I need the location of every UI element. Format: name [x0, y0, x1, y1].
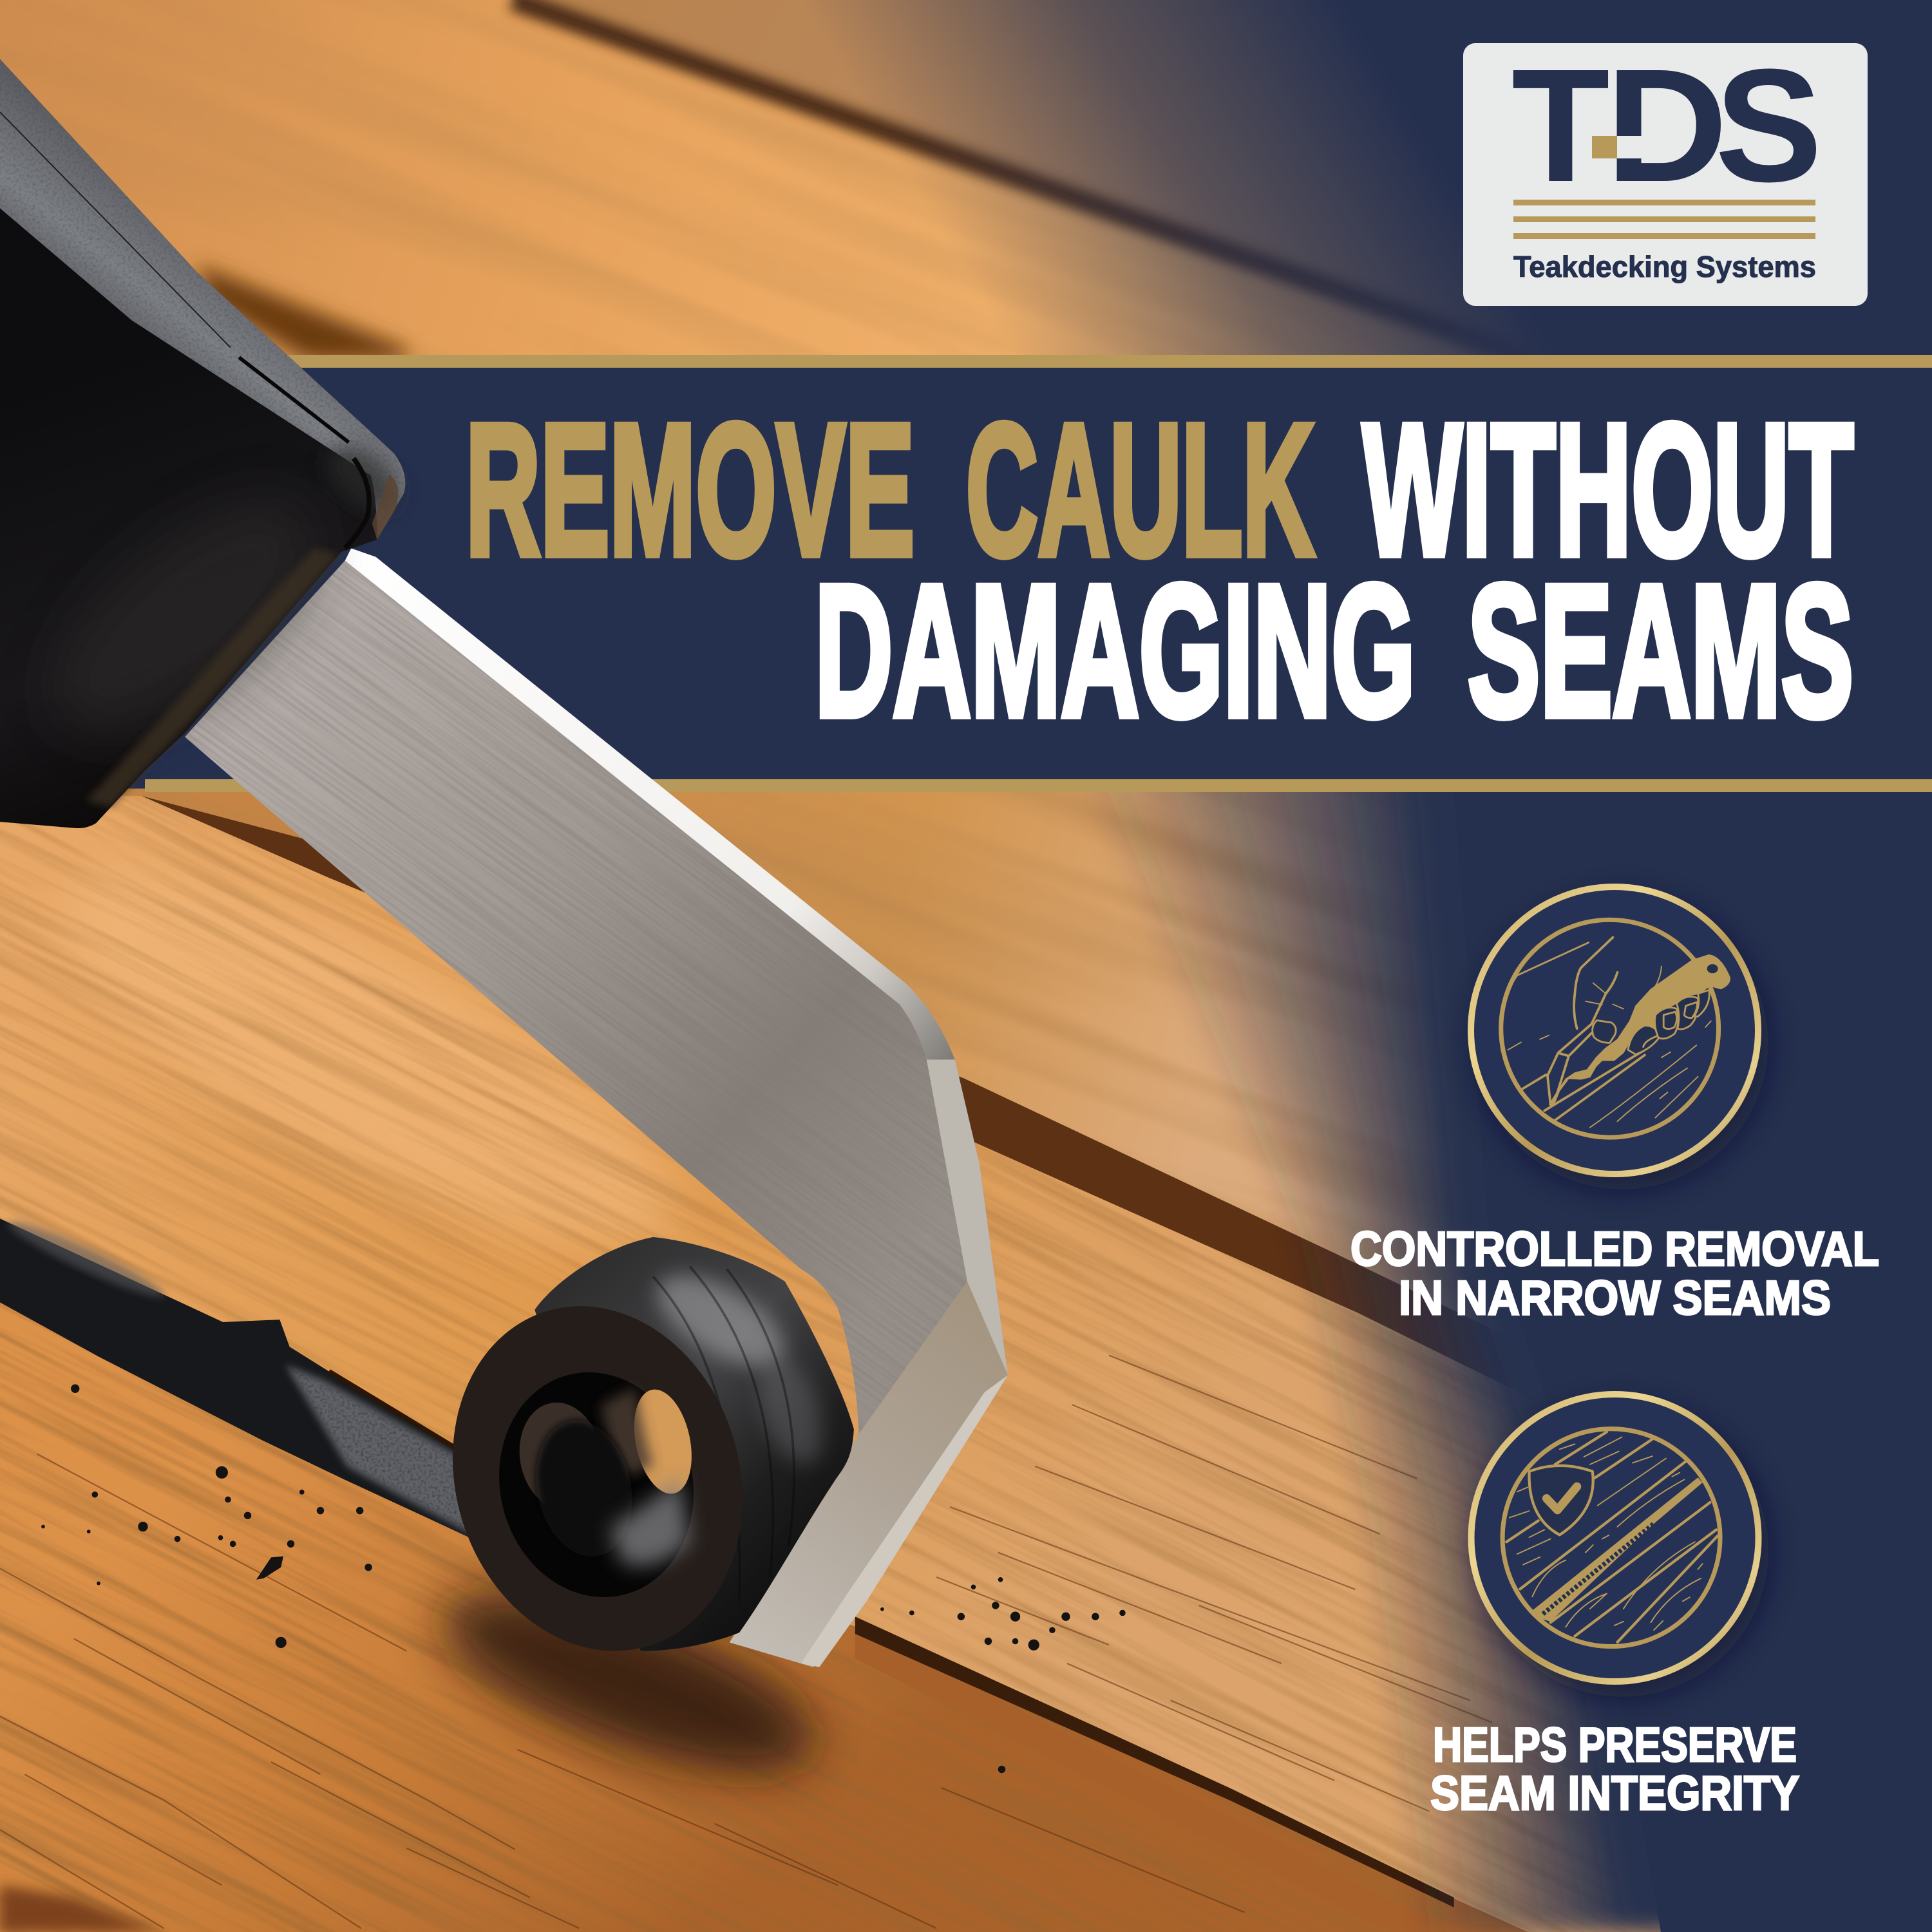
text: controlled removal: IN NARROW SEAMS	[1399, 1271, 1831, 1325]
navy fade overlay: lower right	[1084, 739, 1932, 1932]
icon: shield over deck seam	[1471, 1394, 1758, 1681]
wood above banner	[0, 0, 1497, 355]
text: preserve seam integrity: HELPS PRESERVE	[1433, 1718, 1797, 1772]
seam: upper	[142, 796, 1501, 1383]
shield with check	[1529, 1466, 1593, 1535]
blade main face	[185, 561, 967, 1434]
logo letters TDS	[1511, 35, 1823, 215]
text: preserve seam integrity	[1430, 1718, 1799, 1820]
text: controlled removal	[1350, 1222, 1879, 1325]
tool: handle	[0, 59, 412, 828]
title: DAMAGING	[815, 546, 1416, 755]
tool handle silhouette	[1549, 955, 1730, 1106]
title: REMOVE	[466, 385, 914, 594]
seam: lower	[855, 1634, 1176, 1805]
roll end face	[411, 1270, 784, 1687]
inner surface highlight	[610, 1479, 690, 1566]
shadow under caulk roll	[421, 1554, 835, 1810]
logo letters TDS: S	[1715, 35, 1823, 215]
banner	[145, 355, 1932, 792]
title	[466, 385, 1853, 755]
caulk roll	[411, 1237, 854, 1687]
title: CAULK	[966, 385, 1314, 594]
logo wordmark: Teakdecking Systems	[1513, 250, 1816, 283]
roll body	[535, 1237, 854, 1651]
logo letters TDS: D	[1605, 35, 1728, 215]
tool: blade	[185, 548, 1008, 1667]
blade outline	[1548, 1024, 1591, 1104]
debris crumbs	[41, 1385, 1126, 1773]
logo gold stripes	[1513, 200, 1815, 239]
gold seam band	[1531, 1477, 1703, 1622]
text: preserve seam integrity: SEAM INTEGRITY	[1430, 1766, 1799, 1820]
wood below banner	[0, 788, 1661, 1932]
icon: hand removing caulk with tool	[1471, 887, 1758, 1174]
wood grain lines	[0, 1356, 1492, 1928]
logo card	[1463, 35, 1868, 306]
through hole showing wood	[625, 1384, 701, 1499]
blade lower facet	[730, 1282, 1008, 1667]
logo letters TDS: T	[1511, 35, 1610, 215]
fingers	[1593, 990, 1709, 1054]
text: controlled removal: CONTROLLED REMOVAL	[1350, 1222, 1879, 1276]
caulk strip	[0, 1213, 483, 1544]
blade top bevel	[345, 548, 1008, 1383]
handle top facet	[0, 59, 405, 540]
logo gold square	[1592, 136, 1617, 158]
